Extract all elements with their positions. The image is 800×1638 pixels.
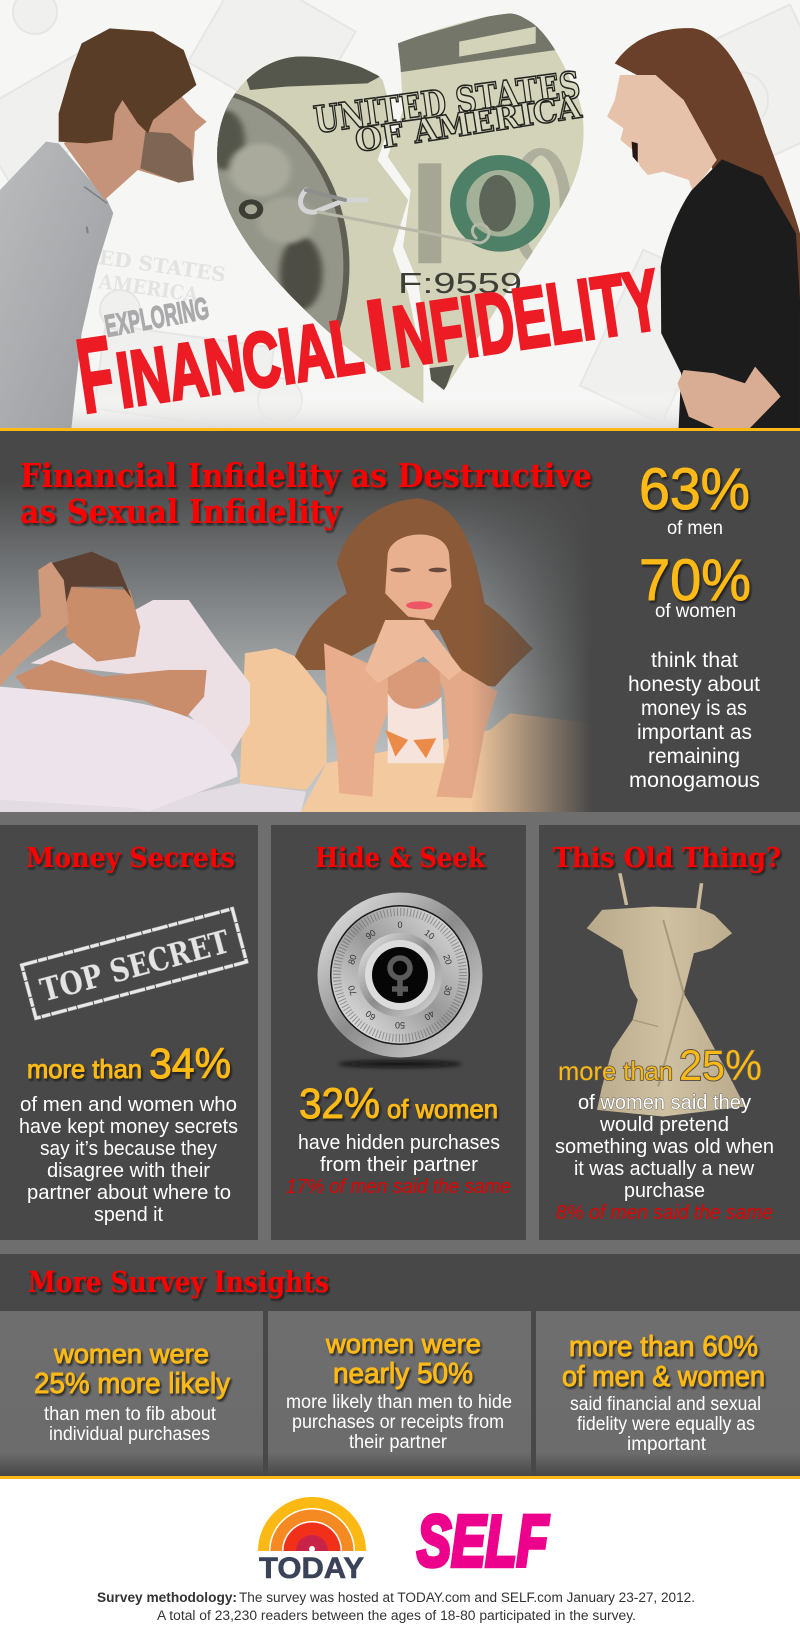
card: nearly 50%: [268, 1311, 531, 1476]
stat: more than 34%: more than: [27, 1054, 142, 1084]
text: body: of women said they: [578, 1091, 752, 1114]
panel: more survey insights: [0, 1254, 800, 1476]
icon: safe dial: 50: [395, 1020, 405, 1030]
text: men comparison: 8% of men said the same: [556, 1202, 773, 1224]
stat: more than 34%: [27, 1040, 231, 1088]
stat: 70% of women: of women: [655, 601, 736, 622]
stat: more than 25%: [558, 1042, 762, 1090]
safety pin: [300, 190, 489, 243]
heading: Hide & Seek: [315, 843, 486, 874]
card: nearly 50%: purchases or receipts from: [292, 1412, 504, 1433]
divider: yellow rule bottom: [0, 1476, 800, 1479]
icon: safe dial: 30: [441, 984, 454, 997]
text: body: say it’s because they: [40, 1137, 218, 1160]
heading: More Survey Insights: [28, 1265, 329, 1299]
card: more than 60%: [536, 1311, 800, 1476]
panel: money secrets: [0, 825, 258, 1240]
card: more than 60%: said financial and sexual: [570, 1394, 761, 1415]
icon: top secret stamp: TOP SECRET: [36, 922, 234, 1009]
card: 25% more likely: women were: [53, 1339, 209, 1369]
text: honesty about money: monogamous: [629, 768, 760, 792]
text: survey methodology: Survey methodology:: [97, 1590, 237, 1605]
text: honesty about money: think that: [651, 648, 738, 672]
text: body: of men and women who: [20, 1093, 237, 1116]
title: financial infidelity: [70, 235, 666, 436]
heading: This Old Thing?: [553, 843, 781, 874]
serial number: F:9559: [398, 268, 522, 300]
icon: safe dial: 40: [422, 1008, 436, 1022]
text: survey methodology: [97, 1590, 695, 1623]
text: body: [555, 1091, 774, 1202]
card: more than 60%: of men & women: [562, 1361, 765, 1393]
hero banner: [0, 0, 800, 447]
title: exploring: EXPLORING: [102, 291, 212, 344]
stat: 32% of women: 32%: [299, 1080, 380, 1128]
text: body: [19, 1093, 238, 1226]
text: body: would pretend: [599, 1113, 729, 1136]
logo: self: SELF: [417, 1502, 549, 1582]
text: honesty about money: honesty about: [628, 672, 760, 696]
text: body: it was actually a new: [574, 1157, 754, 1180]
icon: safe dial: 90: [364, 928, 378, 942]
card: more than 60%: important: [627, 1434, 707, 1455]
text: body: partner about where to: [27, 1181, 231, 1204]
icon: safe dial: 60: [364, 1008, 378, 1022]
heading: Money Secrets: [26, 843, 235, 874]
text: body: something was old when: [555, 1135, 774, 1158]
card: nearly 50%: nearly 50%: [333, 1358, 473, 1390]
panel: this old thing: [539, 825, 800, 1240]
card: more than 60%: more than 60%: [569, 1331, 758, 1363]
heading: Financial Infidelity as Destructive: [20, 456, 592, 495]
card: more than 60%: fidelity were equally as: [577, 1414, 755, 1435]
photo: woman shouting: [607, 28, 800, 428]
text: honesty about money: money is as: [641, 696, 747, 720]
text: honesty about money: important as: [637, 720, 752, 744]
title: financial infidelity: INANCIAL: [111, 301, 368, 424]
icon: safe dial: 80: [346, 953, 359, 966]
panel: hide and seek: [271, 825, 526, 1240]
torn dollar heart: [217, 13, 584, 403]
icon: safe dial: 70: [346, 984, 359, 997]
text: honesty about money: [628, 648, 760, 792]
stat: 70% of women: 70%: [639, 548, 751, 613]
title: financial infidelity: F: [70, 315, 121, 436]
logo: today rainbow: TODAY: [259, 1552, 364, 1585]
card: nearly 50%: their partner: [349, 1432, 448, 1453]
text: men comparison: 17% of men said the same: [286, 1176, 511, 1198]
icon: safe dial: [318, 892, 482, 1067]
title: financial infidelity: I: [360, 278, 398, 392]
icon: safe dial: 0: [397, 920, 403, 930]
text: body: from their partner: [320, 1153, 478, 1176]
stat: more than 34%: 34%: [149, 1040, 231, 1088]
icon: safe dial: 20: [441, 953, 454, 966]
band background: [0, 812, 800, 1254]
card: 25% more likely: 25% more likely: [34, 1368, 230, 1400]
text: body: disagree with their: [47, 1159, 210, 1182]
text: survey methodology: The survey was hosted at TODAY.com and SELF.com January 23-27, 2012.: [239, 1590, 695, 1605]
bill lettering: [311, 62, 585, 160]
panel: destructive as sexual infidelity: [0, 431, 800, 812]
stat: 63% of men: 63%: [639, 457, 750, 522]
text: body: purchase: [624, 1179, 705, 1202]
stat: more than 25%: 25%: [679, 1042, 762, 1090]
text: body: have kept money secrets: [19, 1115, 238, 1138]
text: survey methodology: A total of 23,230 readers between the ages of 18-80 participated in the survey.: [157, 1608, 636, 1623]
divider: yellow rule top: [0, 428, 800, 431]
stat: more than 25%: more than: [558, 1056, 673, 1086]
text: honesty about money: remaining: [648, 744, 740, 768]
icon: female symbol: [390, 958, 410, 996]
logo: today rainbow: [258, 1497, 366, 1585]
text: body: [298, 1131, 500, 1176]
stat: 32% of women: of women: [387, 1094, 498, 1124]
ghost bill lettering: AMERICA: [96, 269, 200, 307]
card: 25% more likely: than men to fib about: [44, 1404, 217, 1425]
heading: [20, 456, 592, 531]
footer: [0, 1479, 800, 1638]
photo: man shouting: [0, 28, 207, 428]
icon: safe dial: 10: [422, 928, 436, 942]
stat: 32% of women: [299, 1080, 498, 1128]
card: 25% more likely: individual purchases: [49, 1424, 210, 1445]
ghost bill lettering: ED STATES: [97, 245, 227, 287]
heading: as Sexual Infidelity: [20, 492, 342, 531]
photo: couple on bed: [0, 431, 800, 812]
stat: 63% of men: of men: [667, 518, 723, 539]
card: 25% more likely: [0, 1311, 263, 1476]
card: nearly 50%: women were: [325, 1329, 481, 1359]
bill lettering: OF AMERICA: [352, 87, 585, 160]
bill lettering: UNITED STATES: [311, 62, 583, 142]
text: body: spend it: [94, 1203, 163, 1226]
ghost bill lettering: [96, 245, 227, 307]
card: nearly 50%: more likely than men to hide: [286, 1392, 512, 1413]
icon: dress: [587, 873, 745, 1117]
text: body: have hidden purchases: [298, 1131, 500, 1154]
